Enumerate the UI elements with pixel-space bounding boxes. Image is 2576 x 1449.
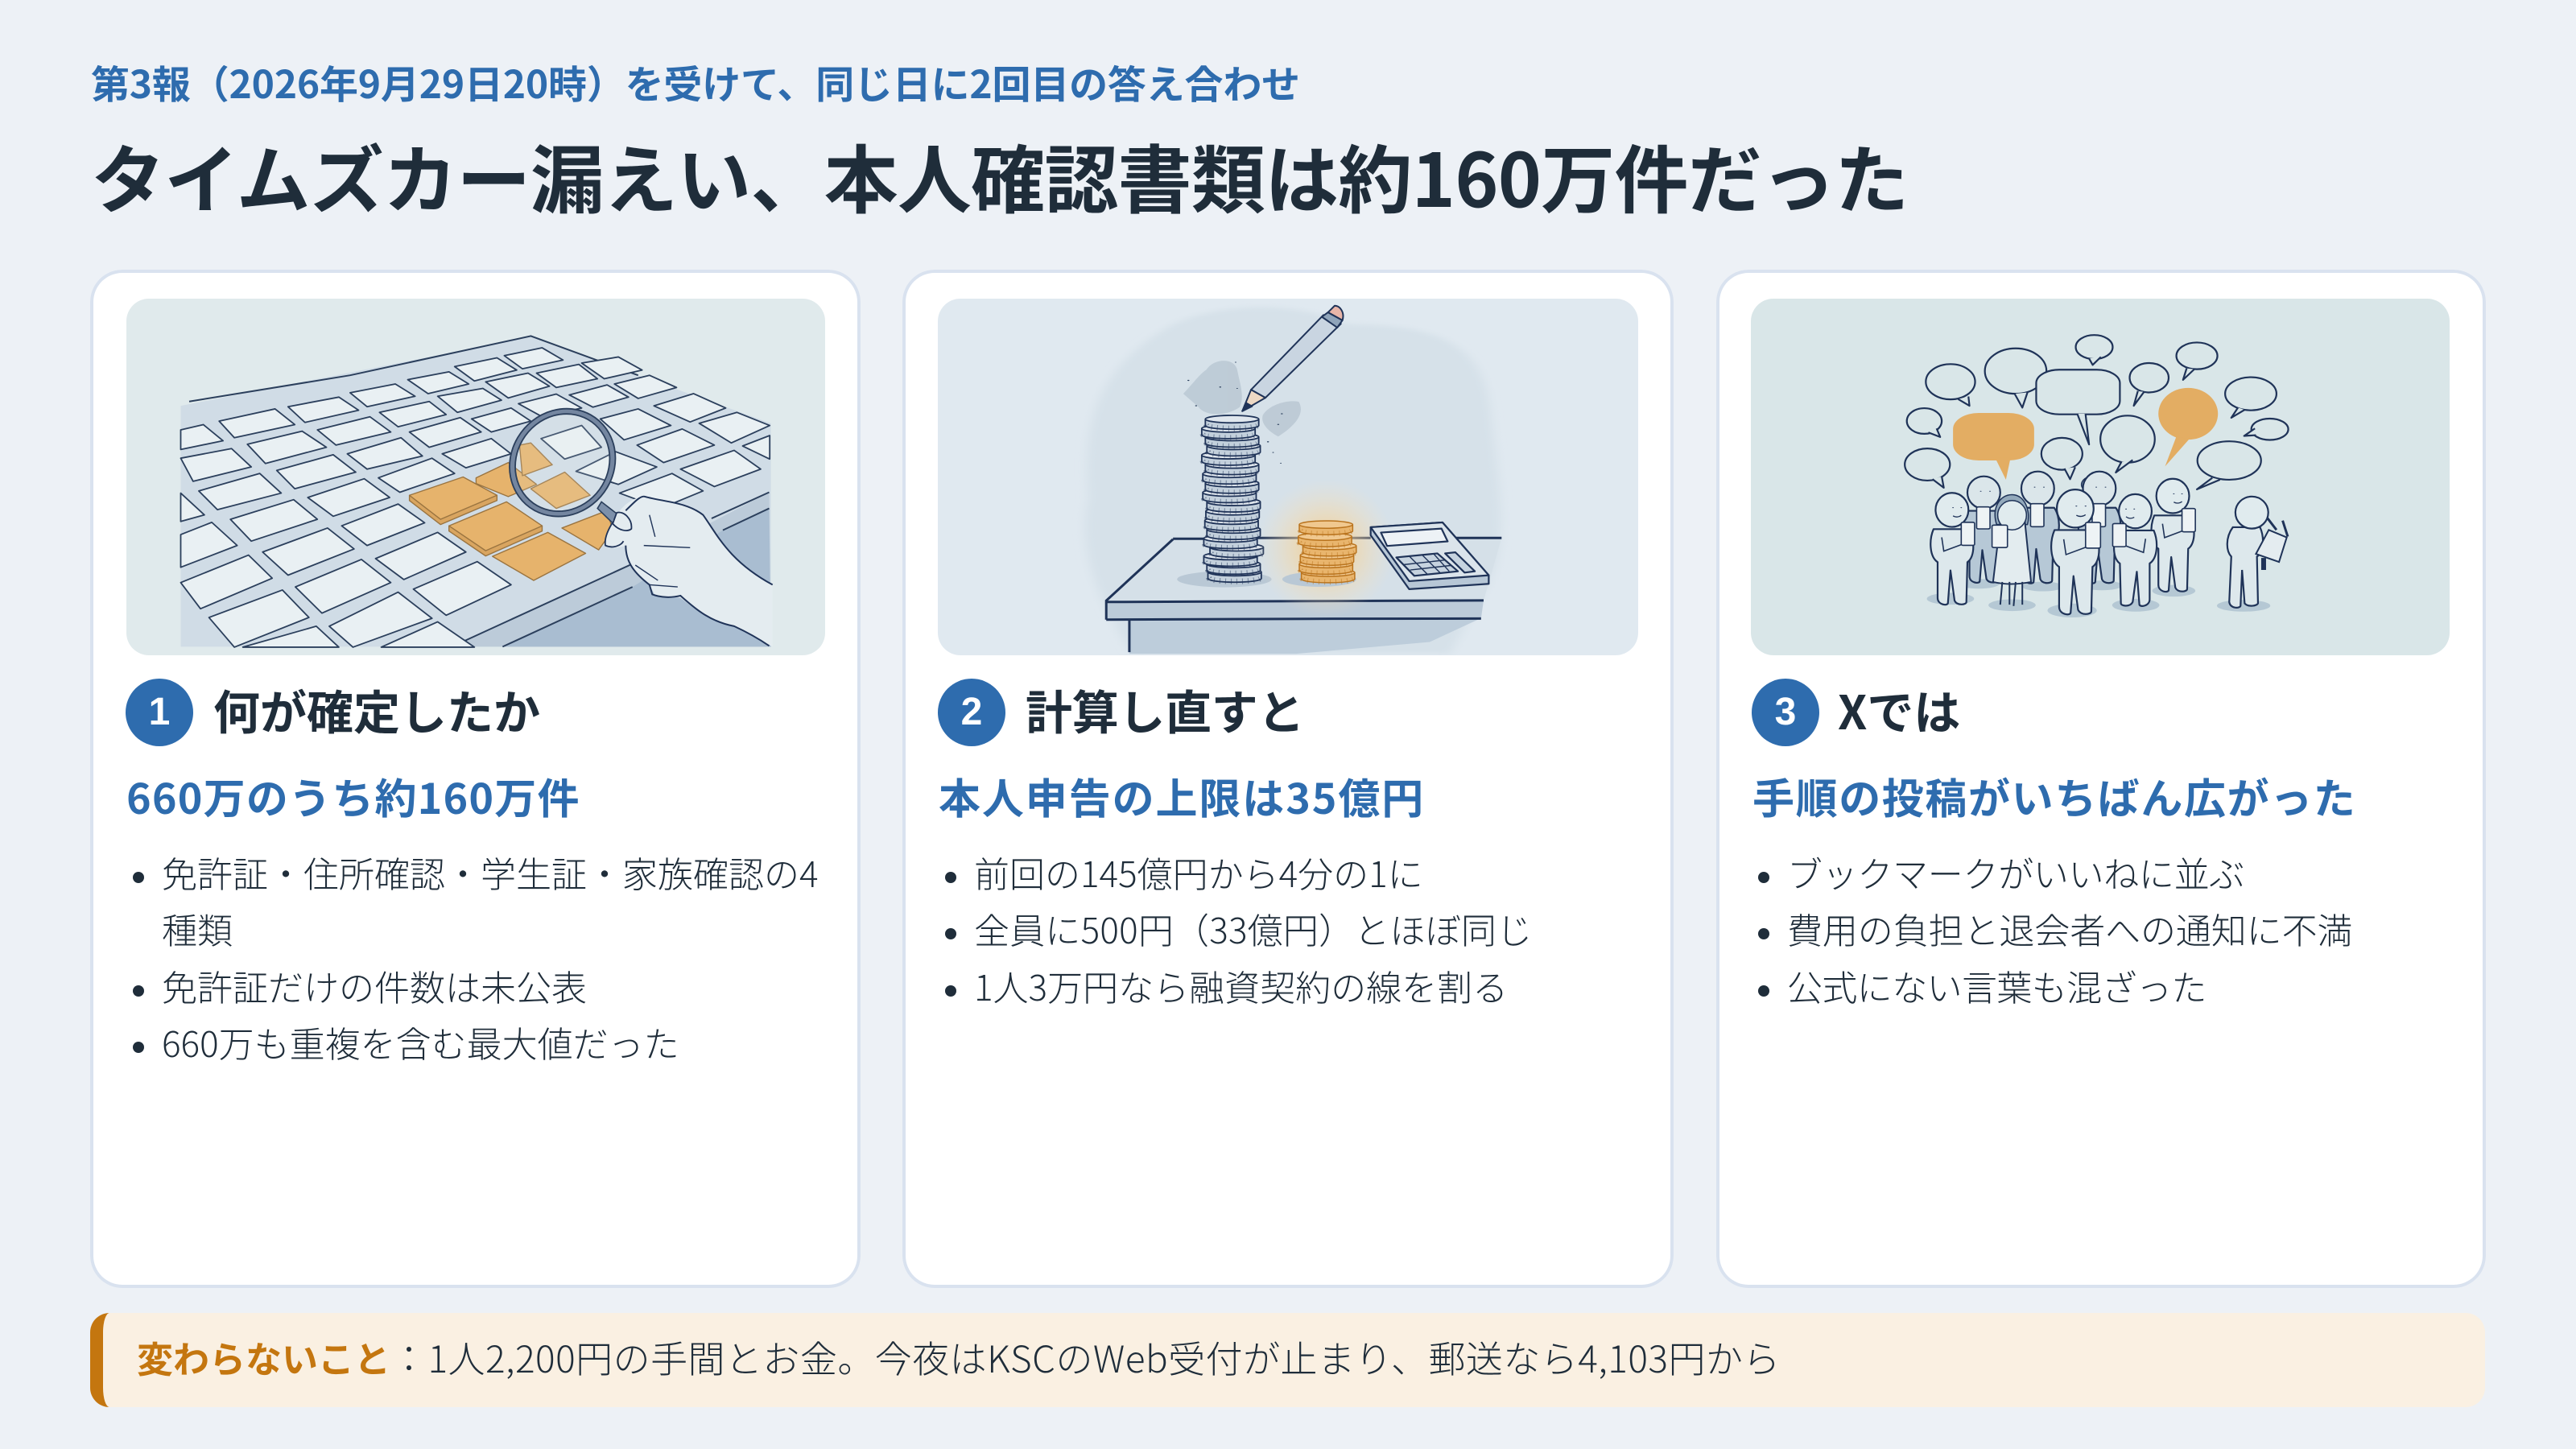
number badge 1: 1: [149, 691, 170, 733]
short orange coin stack: [1282, 521, 1356, 587]
card heading: 何が確定したか: [213, 675, 540, 743]
title: タイムズカー漏えい、本人確認書類は約160万件だった: [91, 122, 1909, 229]
lone person reading a book: [2227, 497, 2288, 608]
number badge 3: 3: [1775, 691, 1796, 733]
bullet list: ブックマークがいいねに並ぶ: [1787, 846, 2244, 898]
bullet list: 前回の145億円から4分の1に: [974, 846, 1423, 898]
panel: reactions on X: [1716, 270, 2486, 1288]
hand holding magnifier: [605, 497, 773, 646]
bullet list: 公式にない言葉も混ざった: [1787, 960, 2207, 1011]
bullet list: 1人3万円なら融資契約の線を割る: [974, 960, 1508, 1011]
card key message: 手順の投稿がいちばん広がった: [1752, 766, 2356, 826]
bullet list: 種類: [162, 902, 233, 954]
bullet list: 全員に500円（33億円）とほぼ同じ: [974, 902, 1532, 954]
bullet list: 免許証だけの件数は未公表: [162, 960, 587, 1011]
grid of white documents: [180, 348, 770, 647]
ground shadows: [1927, 579, 2270, 617]
watercolor wash: [1085, 308, 1501, 654]
bullet list: [133, 846, 819, 1067]
illustration: crowd with speech bubbles: [1751, 299, 2450, 655]
number badge 3: [1752, 679, 1819, 746]
desk wash: [180, 336, 771, 646]
crowd of people reading phones: [1930, 472, 2195, 614]
bullet list: [945, 846, 1532, 1011]
panel: what was confirmed: [90, 270, 861, 1288]
desk: [1106, 538, 1501, 654]
card key message: 本人申告の上限は35億円: [939, 766, 1425, 826]
highlighted orange documents: [410, 443, 613, 580]
card heading: Xでは: [1838, 675, 1960, 743]
highlighted orange speech bubbles: [1953, 388, 2218, 480]
dust clouds above coin stack: [1183, 361, 1301, 436]
number badge 1: [126, 679, 193, 746]
number badge 2: [938, 679, 1005, 746]
number badge 2: 2: [961, 691, 982, 733]
bullet list: 660万も重複を含む最大値だった: [162, 1016, 679, 1067]
bullet list: 費用の負担と退会者への通知に不満: [1787, 902, 2352, 954]
eyebrow heading: 第3報（2026年9月29日20時）を受けて、同じ日に2回目の答え合わせ: [91, 53, 1300, 109]
dust specks: [1187, 361, 1283, 464]
magnifying glass: [501, 403, 627, 526]
tall grey coin stack: [1177, 415, 1272, 588]
pencil: [1242, 306, 1343, 411]
glow behind orange coins: [1257, 479, 1395, 618]
panel: recalculation: [902, 270, 1674, 1288]
illustration: ID cards and magnifying glass: [126, 299, 825, 655]
bullet list: [1758, 846, 2352, 1011]
outline speech bubbles: [1905, 335, 2289, 489]
card key message: 660万のうち約160万件: [126, 766, 580, 826]
illustration: coins, pencil and calculator: [938, 299, 1638, 655]
callout: what does not change: 変わらないこと：1人2,200円の手間とお金。今夜はKSCのWeb受付が止まり、郵送なら4,103円から: [137, 1331, 1781, 1384]
bullet list: 免許証・住所確認・学生証・家族確認の4: [162, 846, 819, 898]
calculator: [1371, 522, 1488, 589]
callout: what does not change: [90, 1313, 2485, 1407]
card heading: 計算し直すと: [1026, 675, 1304, 743]
